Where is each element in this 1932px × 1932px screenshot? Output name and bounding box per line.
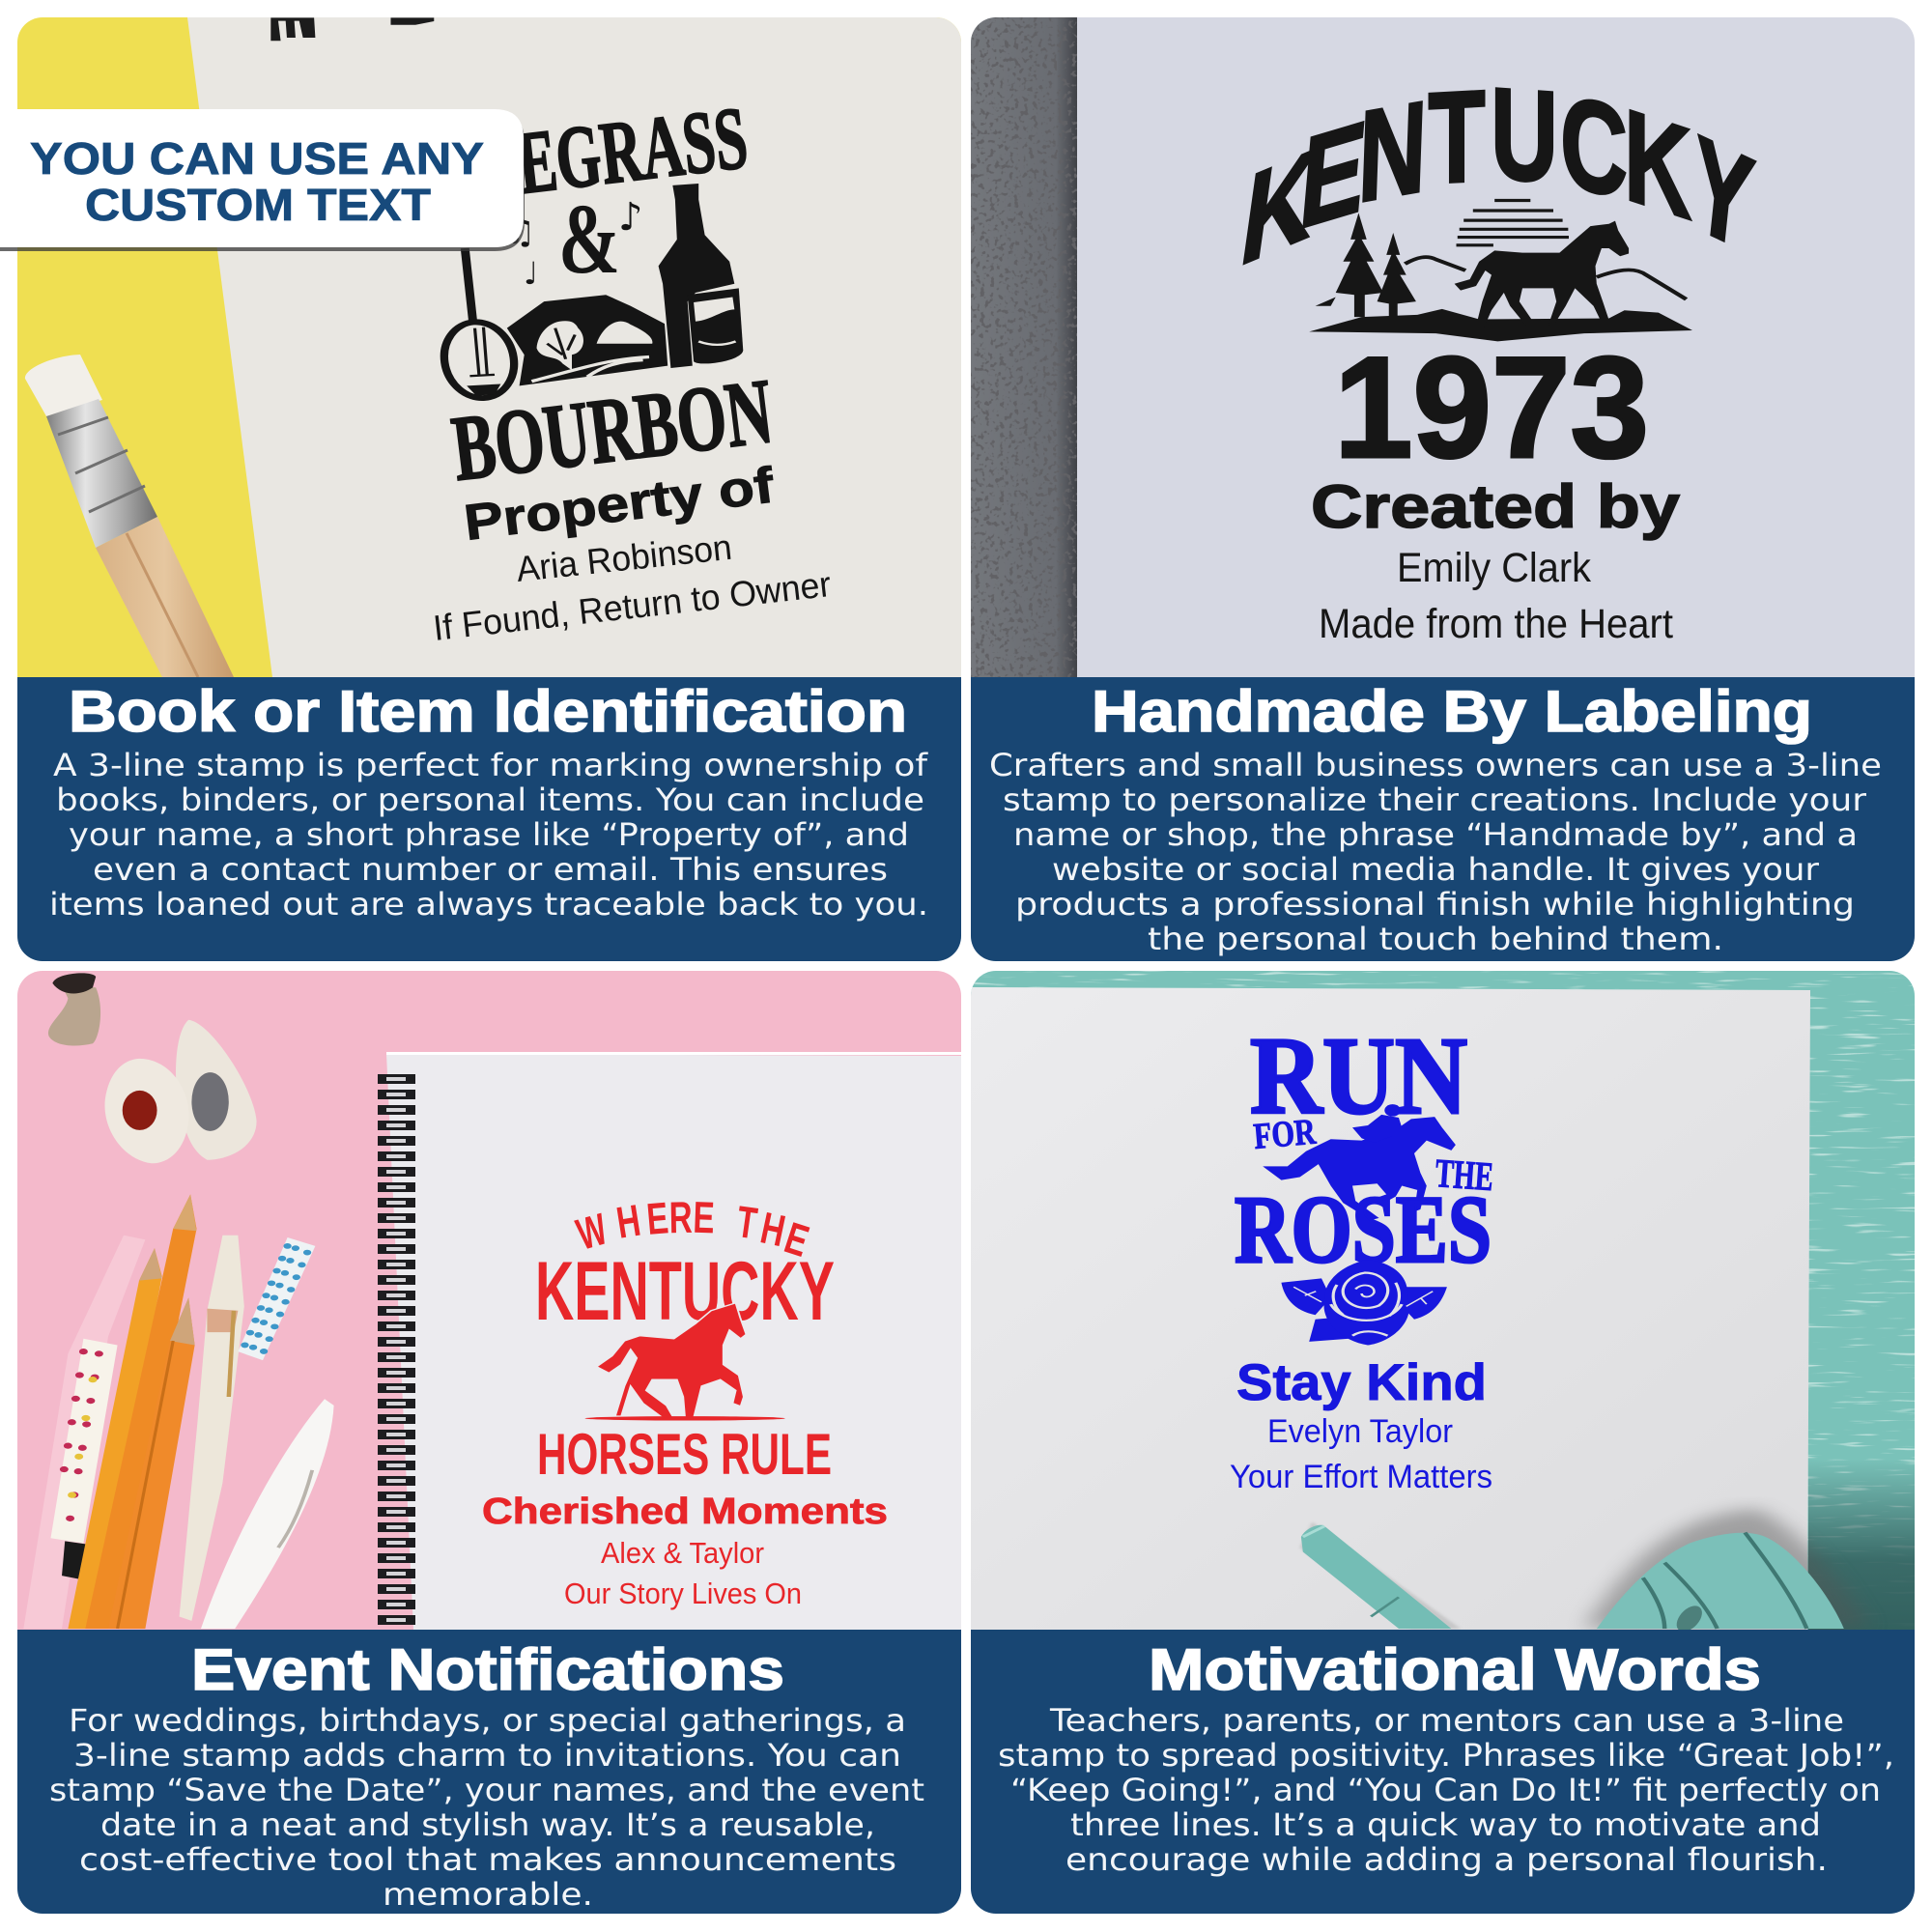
body text: Crafters and small business owners can use a 3-line <box>989 747 1882 783</box>
stamp word: THE: THE <box>1434 1151 1494 1200</box>
badge line 1: YOU CAN USE ANY <box>30 133 484 184</box>
arched word: KENTUCKY: U <box>1491 60 1558 210</box>
body text <box>998 1702 1894 1878</box>
stamp line: Your Effort Matters: Your Effort Matters <box>1230 1459 1492 1495</box>
stamp words: HORSES RULE: HORSES RULE <box>537 1422 832 1487</box>
stamp number: 1973: 1973 <box>1334 327 1649 488</box>
stamp impression: where the Kentucky horses rule <box>482 1193 888 1610</box>
music notes <box>512 201 639 284</box>
arched words: WHERE THE: H <box>613 1196 643 1248</box>
spiral binding <box>378 1074 415 1630</box>
mouse and marker <box>1300 1509 1868 1634</box>
body text: A 3-line stamp is perfect for marking ownership of <box>53 747 928 783</box>
stamp line: Aria Robinson: Aria Robinson <box>515 527 734 589</box>
body text: memorable. <box>383 1876 593 1913</box>
caption panel <box>971 677 1915 961</box>
arched words: WHERE THE: H <box>756 1204 789 1257</box>
stamp line: Made from the Heart: Made from the Heart <box>1319 601 1673 647</box>
panel: book or item identification <box>17 17 961 961</box>
stamp word: RUN: RUN <box>1250 1014 1467 1137</box>
body text: books, binders, or personal items. You can include <box>56 781 924 818</box>
stamp impression: run for the roses <box>1230 1014 1494 1495</box>
panel: motivational words <box>971 971 1915 1914</box>
body text: “Keep Going!”, and “You Can Do It!” fit perfectly on <box>1010 1772 1881 1808</box>
stamp impression: bluegrass and bourbon <box>431 88 833 648</box>
body text: For weddings, birthdays, or special gatherings, a <box>69 1702 906 1739</box>
heading: Book or Item Identification <box>69 679 907 744</box>
arched words: WHERE THE: E <box>779 1213 814 1266</box>
body text <box>49 1702 924 1913</box>
notebook page <box>386 1054 961 1630</box>
stamp line: Alex & Taylor: Alex & Taylor <box>601 1536 764 1570</box>
body text: stamp “Save the Date”, your names, and the event <box>49 1772 924 1808</box>
caption panel <box>971 1630 1915 1914</box>
heading: Handmade By Labeling <box>1092 679 1812 744</box>
illustration: bottle, glass, banjo and landscape <box>440 184 743 401</box>
body text: name or shop, the phrase “Handmade by”, and a <box>1013 816 1858 853</box>
stamp line: Emily Clark: Emily Clark <box>1397 545 1591 591</box>
stamp line: If Found: If Found, Return to Owner <box>431 564 833 648</box>
body text: your name, a short phrase like “Property of”, and <box>69 816 909 853</box>
photo: pink desk with spiral notebook and stationery <box>17 971 961 1630</box>
arched words: WHERE THE <box>572 1193 814 1266</box>
arched word: KENTUCKY: T <box>1429 63 1485 211</box>
photo: white paper on concrete <box>971 17 1915 677</box>
arched word: KENTUCKY: E <box>1294 94 1372 257</box>
illustration: racehorse and jockey <box>1263 1104 1456 1220</box>
ampersand: & <box>558 184 620 295</box>
arched words: WHERE THE: W <box>572 1204 613 1260</box>
stamp word: FOR: FOR <box>1252 1112 1318 1157</box>
music notes: ♪ <box>618 195 643 240</box>
body text: website or social media handle. It gives your <box>1052 851 1820 888</box>
stamp word: ROSES: ROSES <box>1235 1176 1492 1283</box>
notebook page <box>187 17 961 677</box>
arched word: KENTUCKY <box>1242 87 1757 266</box>
stamp word: KENTUCKY: KENTUCKY <box>535 1245 835 1338</box>
music notes: ♫ <box>504 213 535 252</box>
arched word: KENTUCKY: N <box>1356 72 1429 230</box>
panel: event notifications <box>17 971 961 1914</box>
illustration: sun, trees, horse and hills <box>1309 200 1692 341</box>
body text: 3-line stamp adds charm to invitations. You can <box>73 1737 901 1774</box>
badge line 2: CUSTOM TEXT <box>85 180 431 230</box>
heading: Motivational Words <box>1149 1637 1761 1702</box>
caption panel <box>17 1630 961 1914</box>
stamp line: Evelyn Taylor: Evelyn Taylor <box>1267 1413 1453 1450</box>
body text: even a contact number or email. This ensures <box>93 851 888 888</box>
arched word: KENTUCKY: K <box>1234 120 1325 295</box>
body text: the personal touch behind them. <box>1148 921 1723 957</box>
illustration: trotting horse <box>584 1303 785 1421</box>
dark corner shadow <box>1808 1459 1915 1630</box>
panel: handmade by labeling <box>971 17 1915 961</box>
callout badge: you can use any custom text <box>0 109 525 251</box>
stamp line: Our Story Lives On: Our Story Lives On <box>564 1577 802 1610</box>
desk objects: erasers, pencils and pens <box>23 973 334 1629</box>
heading: Event Notifications <box>191 1637 784 1702</box>
arched word: KENTUCKY: K <box>1624 81 1691 248</box>
body text: encourage while adding a personal flourish. <box>1065 1841 1828 1878</box>
arched words: WHERE THE: R <box>668 1194 693 1243</box>
stamp line: Property of: Property of <box>461 457 778 552</box>
arched words: WHERE THE: T <box>734 1198 760 1249</box>
music notes: ♩ <box>524 255 538 292</box>
body text: cost-effective tool that makes announcements <box>79 1841 896 1878</box>
body text <box>989 747 1882 957</box>
body text: date in a neat and stylish way. It’s a reusable, <box>100 1806 875 1843</box>
paper sheet <box>971 987 1810 1630</box>
arched word: KENTUCKY: Y <box>1685 107 1759 280</box>
photo: teal wood desk with paper, marker and mouse <box>971 971 1915 1634</box>
stamp word: BOURBON: BOURBON <box>447 358 778 500</box>
body text: stamp to spread positivity. Phrases like “Great Job!”, <box>998 1737 1894 1774</box>
pencil <box>25 355 234 677</box>
illustration: rose with leaves <box>1281 1260 1447 1345</box>
arched words: WHERE THE: E <box>693 1193 715 1243</box>
body text: Teachers, parents, or mentors can use a 3-line <box>1049 1702 1844 1739</box>
photo: yellow desk with notebook and pencil <box>17 17 961 677</box>
binder rings <box>270 17 434 41</box>
body text: three lines. It’s a quick way to motivate and <box>1070 1806 1821 1843</box>
arched words: WHERE THE: E <box>644 1194 670 1244</box>
body text: items loaned out are always traceable back to you. <box>49 886 928 923</box>
stamp line: Stay Kind: Stay Kind <box>1236 1354 1487 1411</box>
stamp impression: Kentucky 1973 <box>1234 60 1759 647</box>
stamp word: EGRASS: EGRASS <box>512 88 753 213</box>
body text: products a professional finish while highlighting <box>1015 886 1855 923</box>
caption panel <box>17 677 961 961</box>
stamp line: Cherished Moments: Cherished Moments <box>482 1492 888 1532</box>
arched word: KENTUCKY: C <box>1560 68 1628 225</box>
body text <box>49 747 928 923</box>
stamp line: Created by: Created by <box>1311 473 1680 541</box>
body text: stamp to personalize their creations. Include your <box>1003 781 1867 818</box>
